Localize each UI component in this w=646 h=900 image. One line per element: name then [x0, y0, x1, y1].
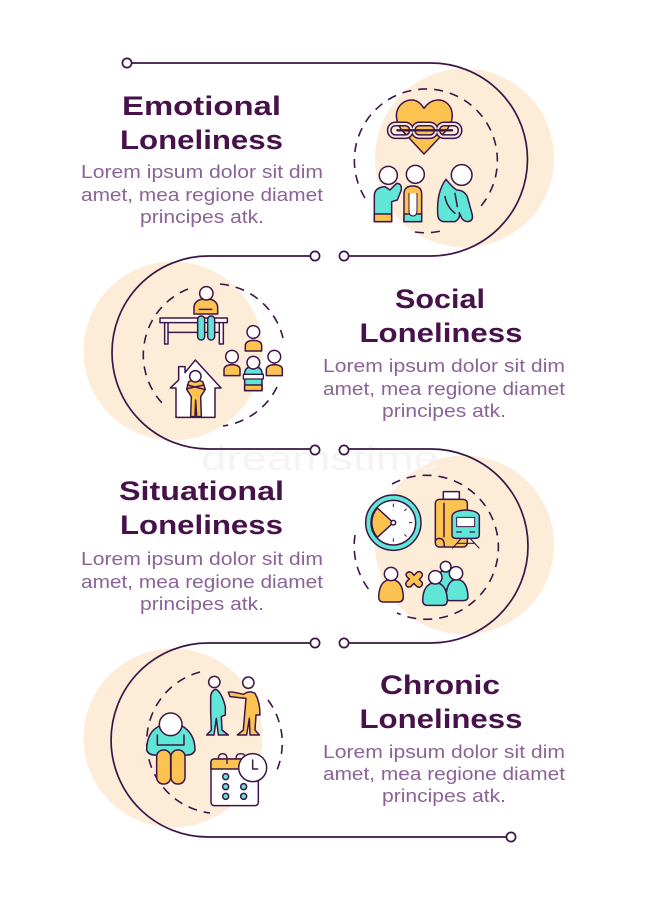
beige circle: emotional [375, 68, 554, 248]
text: situational body: amet, mea regione diamet [81, 571, 323, 592]
heading: Social Loneliness: Loneliness [360, 318, 522, 348]
text: social body: Lorem ipsum dolor sit dim [323, 355, 565, 376]
suitcase [443, 492, 459, 499]
clock [366, 495, 421, 550]
heading: Emotional Loneliness [120, 91, 283, 155]
heading: Emotional Loneliness: Loneliness [120, 125, 283, 155]
icon: chained heart and people [374, 100, 472, 222]
text: situational body: principes atk. [140, 593, 264, 614]
text: social body: amet, mea regione diamet [323, 378, 565, 399]
seated person [147, 726, 195, 755]
text: emotional body: principes atk. [140, 206, 264, 227]
heading: Situational Loneliness: Situational [119, 476, 284, 506]
text: emotional body: amet, mea regione diamet [81, 184, 323, 205]
dashed ring: emotional [354, 89, 497, 233]
heading: Chronic Loneliness: Chronic [380, 670, 500, 700]
person on bench [194, 299, 218, 314]
text: situational body: Lorem ipsum dolor sit dim [81, 548, 323, 569]
person left [374, 183, 401, 222]
text: social body: principes atk. [382, 400, 506, 421]
person right [438, 179, 472, 222]
heart [396, 100, 452, 154]
watermark: dreamstime [201, 440, 439, 478]
group [245, 340, 262, 351]
house [170, 360, 221, 417]
dashed ring: chronic [147, 672, 282, 813]
dashed ring: social [143, 284, 283, 426]
text: emotional body: Lorem ipsum dolor sit dim [81, 161, 323, 182]
person standing [207, 689, 228, 735]
heading: Social Loneliness: Social [395, 284, 485, 314]
calendar [211, 759, 258, 806]
heading: Emotional Loneliness: Emotional [122, 91, 281, 121]
train [452, 510, 479, 538]
person pointing [228, 692, 260, 735]
text: emotional body [81, 161, 323, 227]
beige circle: social [84, 262, 262, 440]
heading: Social Loneliness [360, 284, 522, 348]
heading: Chronic Loneliness [360, 670, 522, 734]
connector line [111, 58, 528, 842]
beige circle: situational [375, 456, 554, 634]
heading: Chronic Loneliness: Loneliness [360, 704, 522, 734]
dashed ring: situational [354, 475, 498, 619]
text: chronic body [323, 741, 565, 806]
chain [389, 124, 460, 137]
text: chronic body: Lorem ipsum dolor sit dim [323, 741, 565, 762]
text: situational body [81, 548, 323, 614]
icon: bench, group and home [160, 287, 282, 417]
text: chronic body: principes atk. [382, 785, 506, 806]
heading: Situational Loneliness: Loneliness [120, 510, 283, 540]
heading: Situational Loneliness [119, 476, 284, 540]
person middle [404, 186, 422, 222]
beige circle: chronic [84, 648, 262, 828]
icon: seated person, pointing people and calendar [147, 676, 267, 806]
text: chronic body: amet, mea regione diamet [323, 763, 565, 784]
bench [160, 318, 227, 344]
icon: clock, luggage and people [366, 492, 479, 605]
text: social body [323, 355, 565, 421]
people and cross [379, 579, 403, 602]
person with crossed arms [187, 380, 205, 417]
